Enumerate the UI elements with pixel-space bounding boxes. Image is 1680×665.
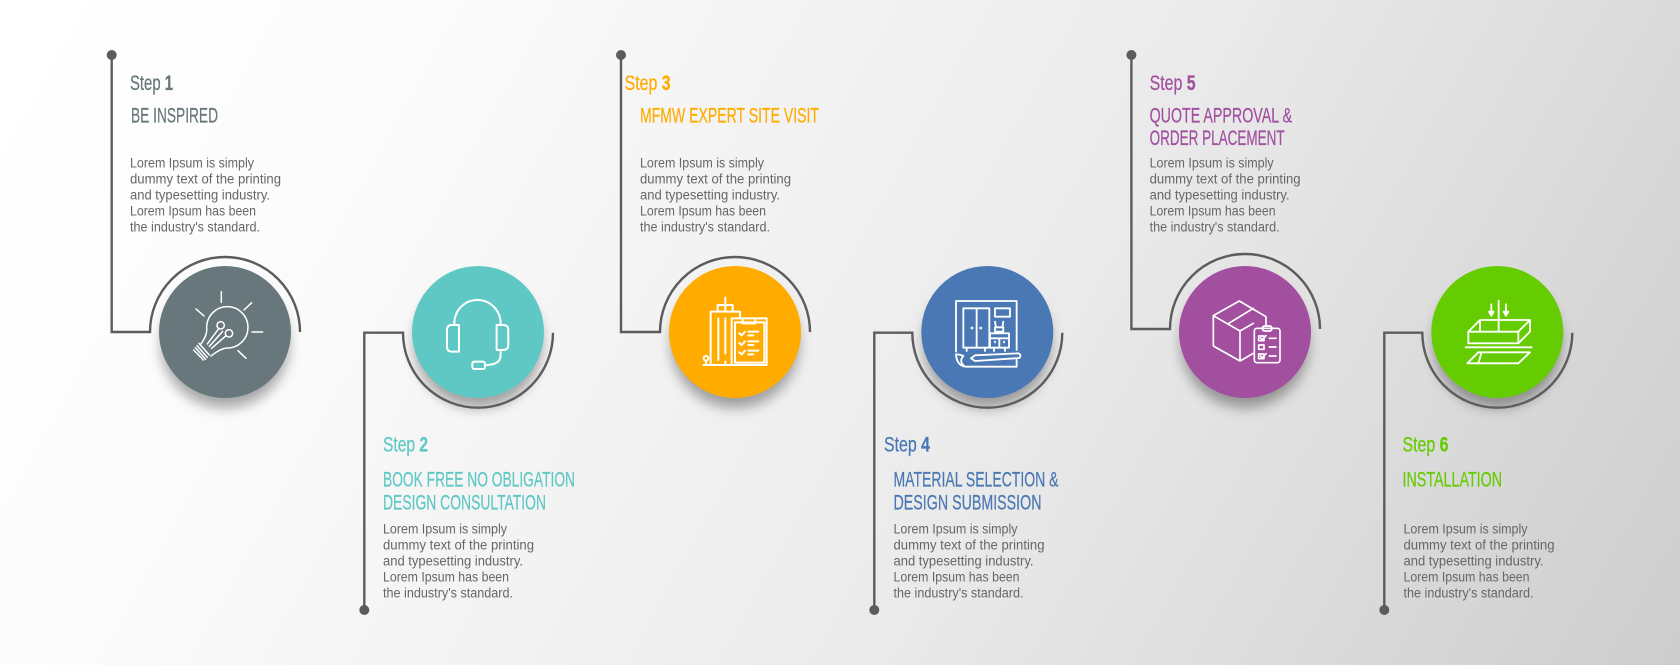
step label: Step 1: [130, 71, 173, 95]
step title: [894, 468, 1058, 514]
description: dummy text of the printing: [1150, 171, 1301, 186]
drop shadow: [1433, 280, 1561, 408]
connector line and arc: [874, 333, 1062, 610]
description: the industry's standard.: [894, 586, 1024, 600]
circle badge: [159, 266, 291, 398]
connector dot: [1126, 50, 1136, 60]
connector line and arc: [1131, 55, 1320, 329]
drop shadow: [923, 280, 1051, 408]
icon: light bulb: [194, 292, 263, 360]
step title: DESIGN CONSULTATION: [383, 490, 546, 514]
icon: installation tray: [1466, 301, 1532, 363]
step title: MATERIAL SELECTION &: [894, 468, 1058, 492]
description: and typesetting industry.: [130, 187, 270, 202]
description: the industry's standard.: [130, 220, 260, 234]
description: Lorem Ipsum is simply: [130, 155, 254, 170]
description: Lorem Ipsum is simply: [1150, 155, 1274, 170]
connector line and arc: [621, 55, 810, 332]
description: Lorem Ipsum is simply: [894, 521, 1018, 536]
description: [383, 521, 534, 600]
description: [1150, 155, 1301, 234]
step title: ORDER PLACEMENT: [1150, 126, 1285, 150]
description: Lorem Ipsum is simply: [383, 521, 507, 536]
step title: [1150, 104, 1292, 150]
description: Lorem Ipsum is simply: [640, 155, 764, 170]
connector line and arc: [364, 333, 553, 610]
panel: step 4: [869, 266, 1062, 615]
description: and typesetting industry.: [1404, 553, 1544, 568]
description: dummy text of the printing: [130, 171, 281, 186]
connector line and arc: [1384, 333, 1572, 610]
circle badge: [921, 266, 1053, 398]
circle badge: [412, 266, 544, 398]
step label: Step 3: [625, 71, 671, 95]
description: Lorem Ipsum has been: [383, 570, 509, 584]
description: Lorem Ipsum is simply: [1404, 521, 1528, 536]
description: the industry's standard.: [1150, 220, 1280, 234]
description: [130, 155, 281, 234]
description: Lorem Ipsum has been: [640, 204, 766, 218]
description: Lorem Ipsum has been: [1404, 570, 1530, 584]
step label: Step 5: [1150, 71, 1196, 95]
connector dot: [1379, 605, 1389, 615]
connector dot: [869, 605, 879, 615]
description: Lorem Ipsum has been: [130, 204, 256, 218]
connector dot: [359, 605, 369, 615]
step title: QUOTE APPROVAL &: [1150, 104, 1292, 128]
description: and typesetting industry.: [383, 553, 523, 568]
description: the industry's standard.: [383, 586, 513, 600]
description: Lorem Ipsum has been: [1150, 204, 1276, 218]
step label: Step 2: [383, 433, 428, 457]
description: [1404, 521, 1554, 600]
description: [640, 155, 791, 234]
connector dot: [616, 50, 626, 60]
icon: headset: [447, 300, 508, 369]
step title: BE INSPIRED: [131, 104, 218, 128]
drop shadow: [414, 280, 542, 408]
panel: step 3: [616, 50, 819, 408]
step title: INSTALLATION: [1402, 468, 1502, 492]
icon: furniture plan and pencil: [956, 301, 1020, 367]
panel: step 2: [359, 266, 575, 615]
icon: box and checklist: [1213, 301, 1280, 363]
step title: DESIGN SUBMISSION: [894, 490, 1042, 514]
description: and typesetting industry.: [640, 187, 780, 202]
step title: [383, 468, 575, 514]
connector dot: [107, 50, 117, 60]
description: dummy text of the printing: [1404, 537, 1554, 552]
panel: step 6: [1379, 266, 1572, 615]
drop shadow: [1181, 280, 1309, 408]
description: and typesetting industry.: [894, 553, 1034, 568]
step label: Step 6: [1402, 433, 1449, 457]
connector line and arc: [112, 55, 300, 332]
icon: building and clipboard: [703, 298, 767, 365]
panel: step 5: [1126, 50, 1320, 408]
step title: BOOK FREE NO OBLIGATION: [383, 468, 575, 492]
description: dummy text of the printing: [894, 537, 1044, 552]
drop shadow: [161, 280, 289, 408]
panel: step 1: [107, 50, 300, 408]
description: dummy text of the printing: [383, 537, 534, 552]
circle badge: [1431, 266, 1563, 398]
step label: Step 4: [884, 433, 930, 457]
description: [894, 521, 1044, 600]
step title: MFMW EXPERT SITE VISIT: [640, 104, 819, 128]
circle badge: [1179, 266, 1311, 398]
drop shadow: [671, 280, 799, 408]
description: the industry's standard.: [1404, 586, 1534, 600]
description: and typesetting industry.: [1150, 187, 1290, 202]
circle badge: [669, 266, 801, 398]
description: dummy text of the printing: [640, 171, 791, 186]
description: the industry's standard.: [640, 220, 770, 234]
description: Lorem Ipsum has been: [894, 570, 1020, 584]
